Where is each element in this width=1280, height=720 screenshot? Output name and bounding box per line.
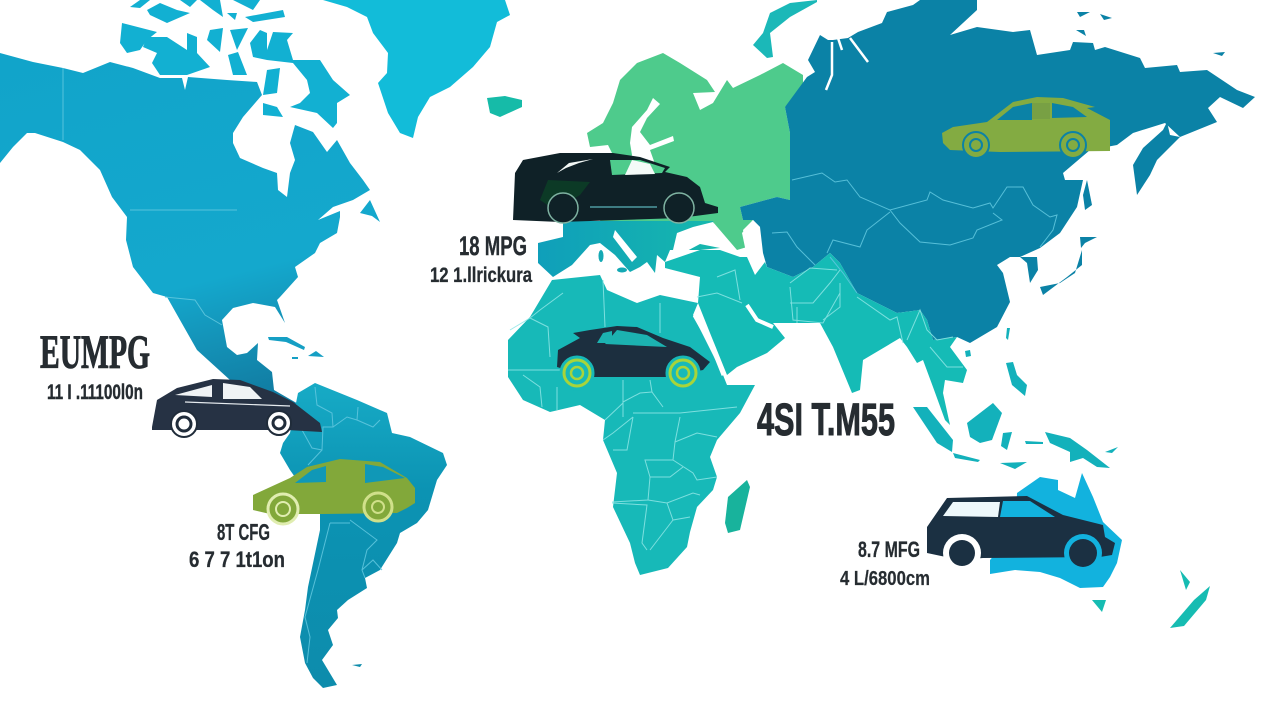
region: Falkland Islands (352, 664, 362, 667)
label: Europe value: 12 1.llrickura (430, 264, 532, 287)
region: Pacific islands and Kamchatka (1040, 12, 1225, 295)
car: green sedan, Russia (942, 97, 1110, 158)
label: EUMPG value: 11 I .11100l0n (47, 381, 143, 404)
region: Madagascar (725, 480, 750, 533)
car: green sedan, South America (253, 459, 415, 524)
south america borders (302, 387, 382, 663)
label: South America value (189, 519, 285, 572)
region: Adriatic Sea (613, 230, 637, 262)
region: Mediterranean islands (598, 250, 627, 272)
label: large EUMPG: EUMPG (40, 326, 150, 379)
region: Novaya Zemlya (753, 0, 817, 58)
region: Arctic Canada islands (120, 0, 350, 128)
label: South America value: 8T CFG (217, 519, 270, 545)
label: Europe value: 18 MPG (459, 231, 527, 261)
region: Red Sea and Persian Gulf (695, 305, 773, 375)
region: Northern Europe and Russia west (587, 53, 803, 250)
region: Newfoundland (360, 200, 380, 222)
label: Europe value (430, 231, 532, 287)
region: New Zealand and Tasmania (1092, 570, 1210, 628)
region: Iceland (487, 96, 522, 117)
label: Australia value (840, 537, 930, 590)
car: dark hatchback, Australia (927, 496, 1115, 572)
label: Australia value: 8.7 MFG (858, 537, 920, 562)
label: Indian Ocean value: 4SI T.M55 (757, 394, 895, 445)
region: Africa (508, 275, 755, 575)
asia borders (772, 173, 1057, 293)
car: dark sedan, Central America (152, 379, 322, 437)
region: Russia and East Asia (740, 0, 1255, 343)
region: Greenland (323, 0, 510, 138)
region: Australia (990, 473, 1122, 588)
car: black SUV, Europe (513, 153, 718, 223)
north america borders (63, 68, 237, 325)
region: Baltic Sea (624, 98, 674, 178)
region: Siberian river inlets (826, 38, 868, 90)
region: Black Sea (673, 222, 722, 252)
africa and middle east borders (508, 268, 963, 550)
region: Indonesia and Philippines (913, 328, 1118, 469)
region: Caribbean islands (268, 337, 324, 359)
car: dark sedan, Africa (557, 326, 710, 390)
region: Caspian Sea (742, 220, 763, 275)
region: North America (0, 53, 370, 430)
region: Middle East, India and Southeast Asia (665, 250, 967, 425)
label: Australia value: 4 L/6800cm (840, 568, 930, 590)
region: South America (280, 383, 447, 688)
region: Southern Europe (538, 221, 720, 277)
label: South America value: 6 7 7 1t1on (189, 547, 285, 572)
